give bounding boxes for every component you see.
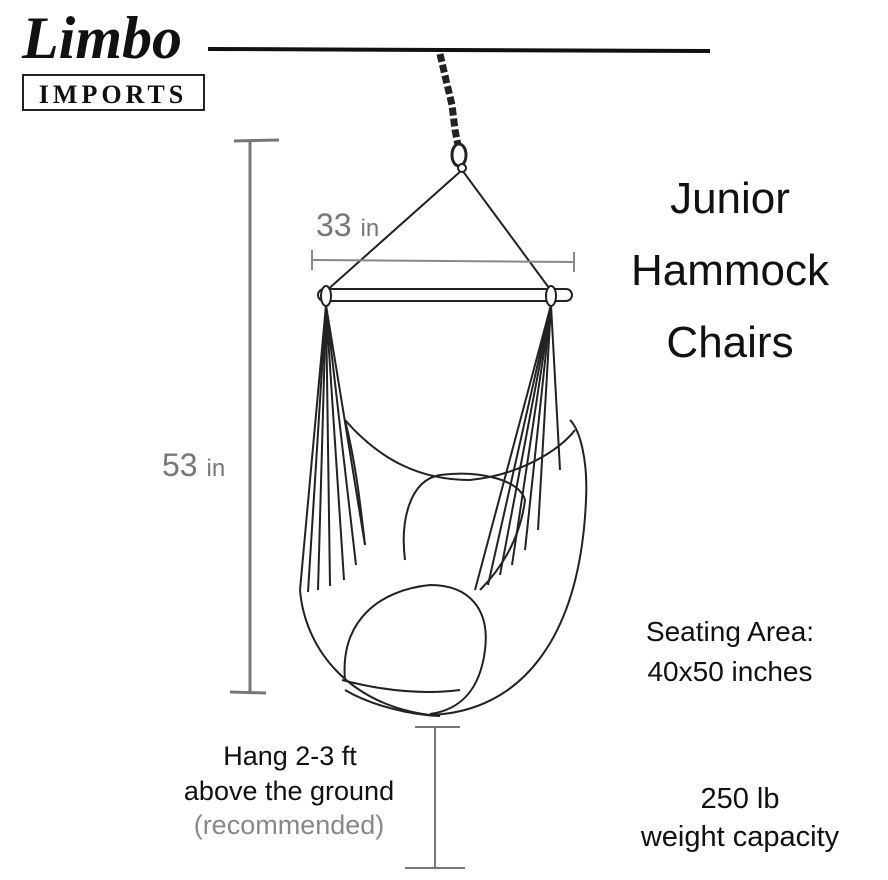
logo: Limbo <box>21 5 182 71</box>
seating area text <box>646 616 814 687</box>
title: Junior <box>670 174 790 223</box>
title: Hammock <box>631 246 830 295</box>
chain and ring <box>440 54 466 166</box>
ceiling beam <box>208 49 710 51</box>
weight capacity text: 250 lb <box>700 783 780 815</box>
dimension: height 53 in: 53 in <box>162 447 225 483</box>
weight capacity text: weight capacity <box>640 821 840 853</box>
logo <box>21 5 204 110</box>
seating area text: 40x50 inches <box>647 656 813 687</box>
dimension: hang height <box>405 727 465 868</box>
dimension: width 33 in: 33 in <box>316 207 379 243</box>
seating area text: Seating Area: <box>646 616 814 647</box>
hammock chair body <box>300 305 586 716</box>
hanging triangle and spreader bar <box>318 164 572 306</box>
title: Chairs <box>666 318 794 367</box>
hang recommendation text: above the ground <box>184 776 394 806</box>
weight capacity text <box>640 783 840 853</box>
hang recommendation text: (recommended) <box>194 810 384 840</box>
hang recommendation text: Hang 2-3 ft <box>223 741 357 771</box>
hang recommendation text <box>184 741 394 840</box>
logo: IMPORTS <box>39 80 187 109</box>
title <box>631 174 830 367</box>
